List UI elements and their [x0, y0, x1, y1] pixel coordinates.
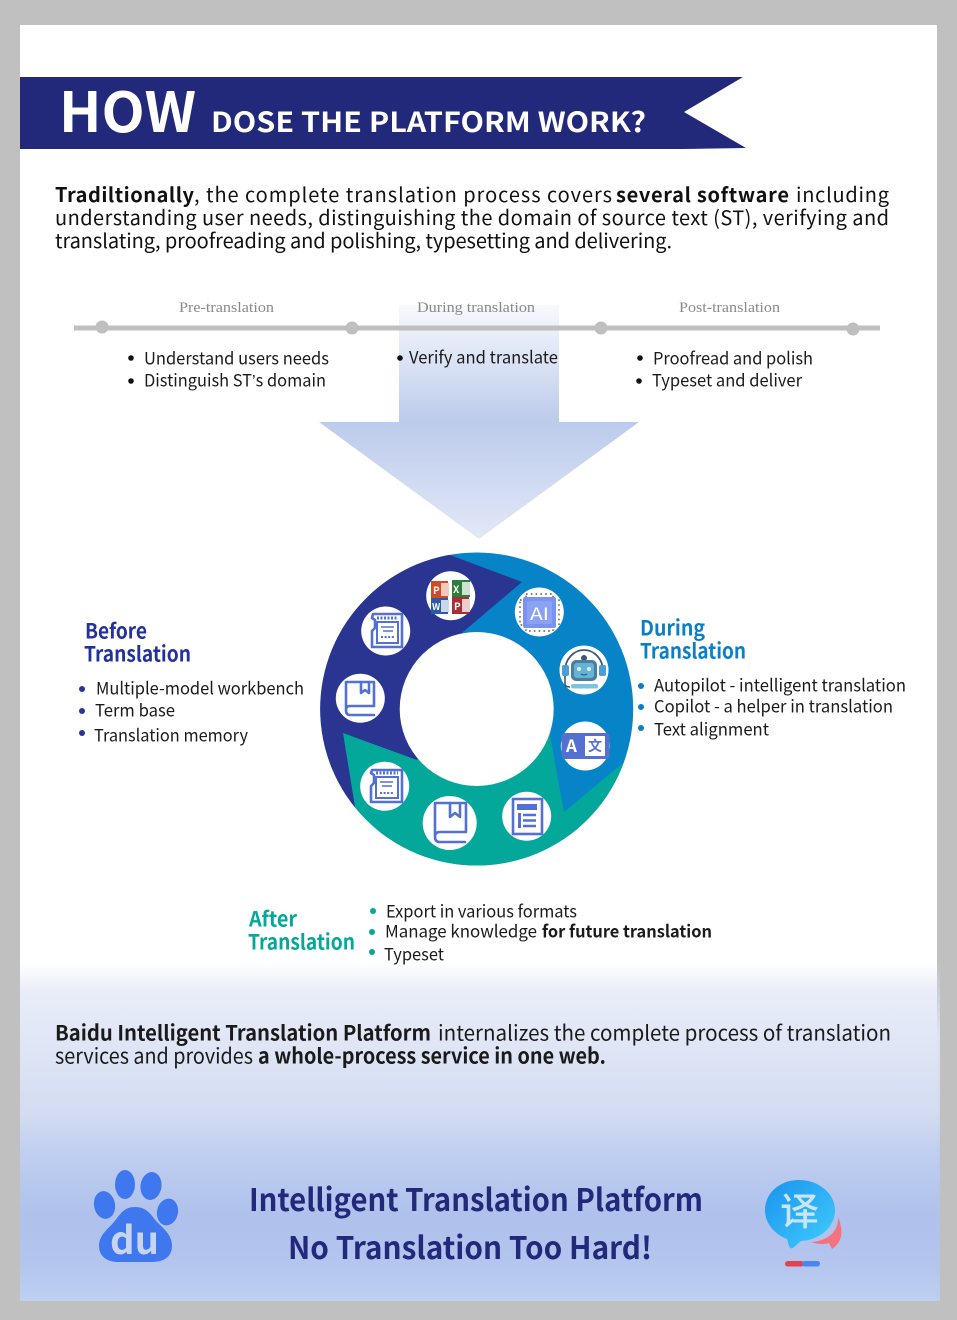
icon: office apps: W	[432, 600, 441, 613]
during translation heading: During	[640, 612, 705, 642]
summary paragraph: services and provides	[55, 1040, 253, 1070]
intro paragraph: understanding user needs, distinguishing the domain of source text (ST), verifying and	[55, 202, 889, 231]
process timeline: During translation	[417, 300, 536, 316]
icon: translate	[561, 722, 610, 770]
title banner: HOW	[59, 68, 196, 148]
after translation list: Manage knowledge	[385, 918, 537, 942]
circular workflow ring	[320, 552, 634, 866]
post-translation bullets	[636, 344, 813, 392]
during-translation bullet: Verify and translate	[409, 344, 558, 368]
intro paragraph: translating, proofreading and polishing, typesetting and delivering.	[55, 225, 672, 254]
icon: Baidu paw logo	[92, 1170, 181, 1265]
process timeline: Post-translation	[679, 300, 781, 316]
icon: translate: A	[565, 732, 577, 757]
after translation list: Export in various formats	[386, 898, 577, 922]
before translation heading	[84, 616, 191, 668]
after translation list: Typeset	[384, 940, 445, 966]
after translation list: for future translation	[542, 918, 712, 942]
before translation list: Term base	[95, 696, 175, 722]
pre-translation bullets	[128, 344, 329, 392]
before translation heading: Translation	[84, 638, 191, 668]
after translation heading: After	[248, 904, 298, 934]
icon: book left	[336, 674, 385, 723]
ring centre hole	[400, 632, 554, 786]
ring: during segment	[320, 552, 633, 866]
ring: after segment	[343, 733, 624, 866]
intro paragraph: including	[796, 179, 889, 208]
icon: memory card upper	[361, 606, 410, 656]
icon: translate app logo: 译	[780, 1181, 819, 1236]
process timeline: Pre-translation	[179, 300, 275, 316]
summary paragraph: internalizes the complete process of translation	[438, 1018, 891, 1048]
icon: book large	[423, 796, 477, 850]
icon: office apps	[426, 571, 475, 620]
pre-translation bullets: Understand users needs	[144, 344, 329, 370]
before translation heading: Before	[85, 616, 147, 646]
during translation list: Copilot - a helper in translation	[654, 692, 893, 718]
intro paragraph	[55, 179, 889, 254]
post-translation bullets: Typeset and deliver	[652, 366, 802, 392]
icon: AI chip	[515, 588, 564, 636]
funnel arrow	[319, 305, 639, 539]
during translation list	[638, 672, 906, 740]
icon: robot headset	[560, 646, 608, 694]
footer slogan	[249, 1175, 703, 1268]
summary paragraph	[55, 1018, 891, 1070]
during translation heading: Translation	[640, 636, 746, 666]
during translation heading	[640, 612, 746, 666]
post-translation bullets: Proofread and polish	[653, 344, 813, 370]
icon: memory card lower	[360, 762, 409, 811]
title banner	[20, 68, 746, 149]
after translation heading	[248, 904, 355, 956]
footer slogan: No Translation Too Hard!	[288, 1223, 652, 1268]
pre-translation bullets: Distinguish ST’s domain	[144, 366, 326, 392]
intro paragraph: several software	[616, 179, 789, 208]
before translation list: Multiple-model workbench	[96, 674, 304, 700]
before translation list	[79, 674, 304, 746]
after translation list	[369, 898, 712, 966]
icon: office apps: P	[454, 598, 461, 613]
before translation list: Translation memory	[94, 722, 248, 746]
summary paragraph: Baidu Intelligent Translation Platform	[55, 1018, 431, 1048]
during translation list: Text alignment	[654, 716, 770, 740]
summary paragraph: a whole-process service in one web.	[258, 1040, 606, 1070]
icon: AI chip: AI	[530, 600, 549, 625]
icon: Baidu paw logo: du	[110, 1210, 159, 1265]
icon: office apps: X	[453, 581, 460, 596]
icon: translate app logo	[765, 1180, 842, 1266]
after translation heading: Translation	[248, 926, 355, 956]
title banner: DOSE THE PLATFORM WORK?	[211, 101, 646, 141]
process timeline	[74, 300, 880, 336]
footer slogan: Intelligent Translation Platform	[249, 1175, 703, 1220]
bottom gradient panel	[20, 962, 940, 1301]
during translation list: Autopilot - intelligent translation	[654, 672, 906, 696]
intro paragraph: , the complete translation process covers	[194, 179, 612, 208]
icon: office apps: P	[433, 582, 440, 597]
ring: before segment	[320, 554, 522, 807]
icon: document	[502, 792, 551, 841]
icon: translate: 文	[588, 736, 602, 756]
intro paragraph: Tradiltionally	[55, 179, 195, 208]
